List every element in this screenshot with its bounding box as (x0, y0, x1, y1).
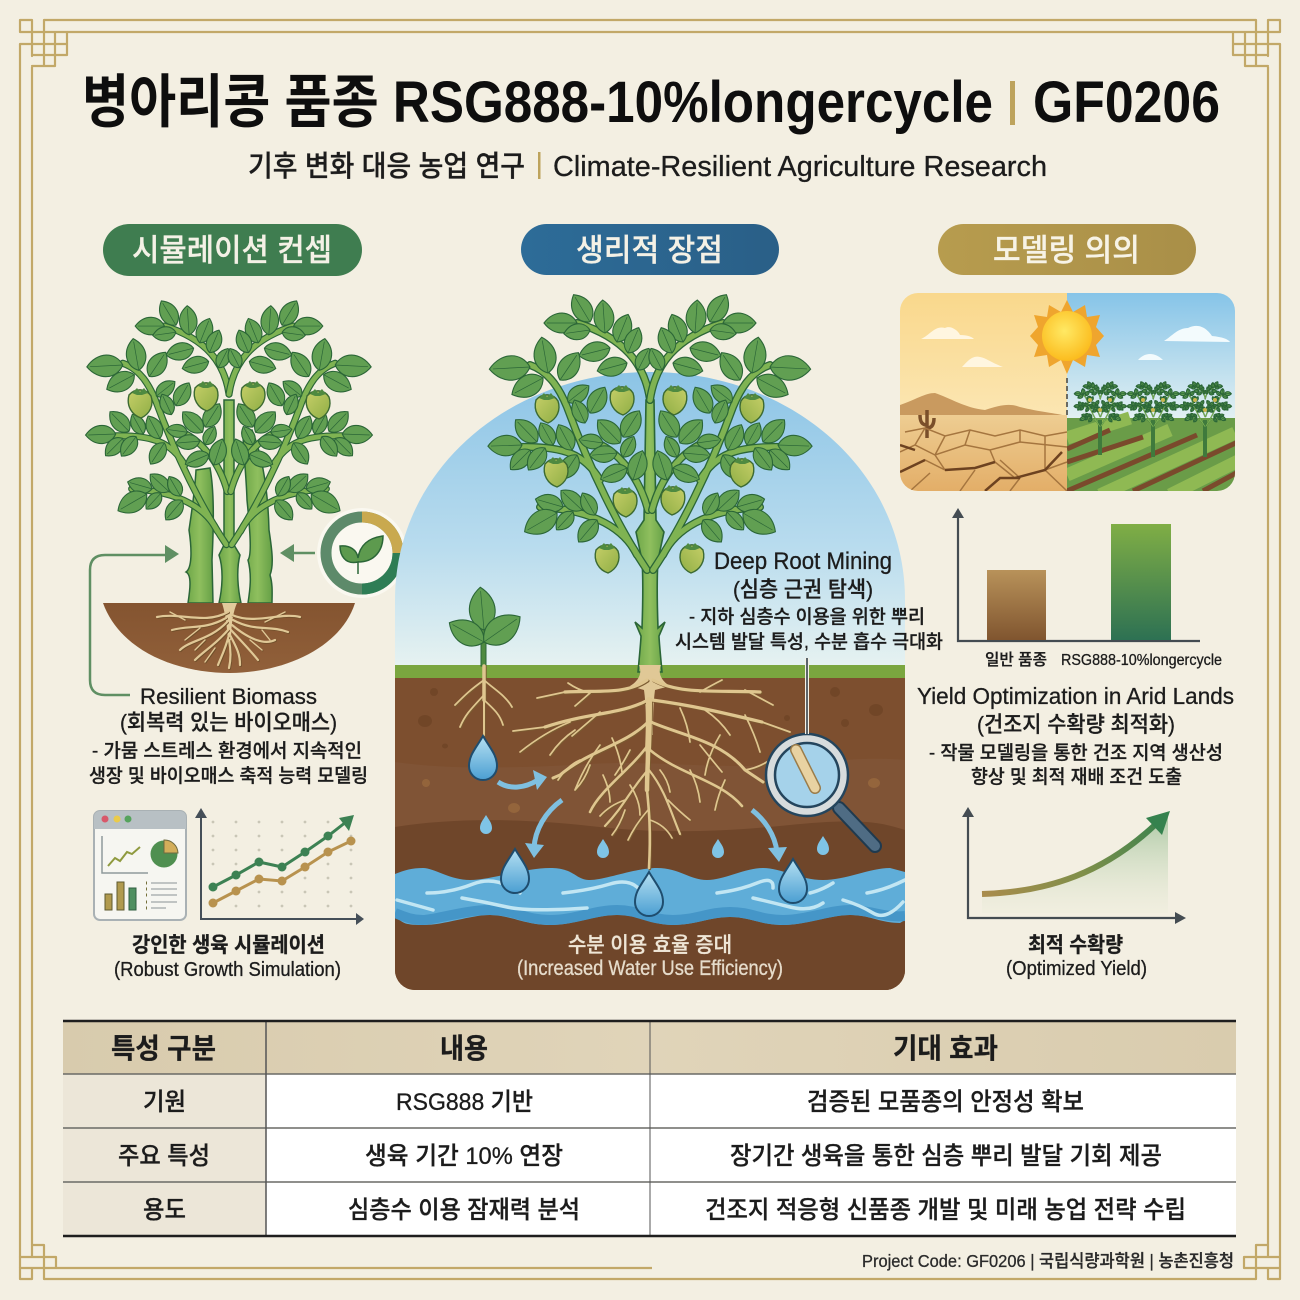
heading pill: simulation concept (103, 224, 362, 276)
table header row: 내용 (440, 1033, 488, 1064)
row: origin: RSG888 기반 (396, 1088, 533, 1116)
subtitle: Climate-Resilient Agriculture Research (553, 151, 1047, 183)
heading pill: modeling significance (938, 224, 1196, 275)
row: origin: 기원 (143, 1088, 186, 1116)
scene: drought vs resilient field (900, 293, 1240, 495)
caption: increased water use efficiency (517, 934, 783, 980)
row: use: 심층수 이용 잠재력 분석 (348, 1196, 580, 1224)
text block: Deep Root Mining (675, 548, 943, 653)
leaf canopy (85, 297, 373, 545)
title: GF0206 (1033, 70, 1220, 135)
text block: Yield Optimization: Yield Optimization in Arid Lands (917, 683, 1234, 709)
table header row: 기대 효과 (893, 1033, 998, 1064)
heading pill: modeling significance: 모델링 의의 (993, 233, 1140, 268)
deep roots (455, 665, 791, 869)
icon: ring with sprout (317, 508, 407, 598)
caption: increased water use efficiency: (Increased Water Use Efficiency) (517, 957, 783, 980)
heading pill: physiological advantage: 생리적 장점 (576, 233, 723, 268)
soil layers (395, 676, 905, 1000)
row: origin: 검증된 모품종의 안정성 확보 (807, 1088, 1084, 1116)
dry side (900, 293, 1067, 491)
grass strip (395, 665, 905, 678)
caption: robust growth simulation: 강인한 생육 시뮬레이션 (132, 934, 325, 957)
seedling (444, 586, 528, 666)
center panel: soil cross-section with arch sky (395, 372, 905, 1000)
water flow arrows (498, 770, 787, 862)
text block: Yield Optimization: 향상 및 최적 재배 조건 도출 (971, 766, 1182, 788)
thick stems (186, 400, 272, 603)
table header row (63, 1021, 1236, 1074)
table body cells (63, 1021, 1236, 1236)
pods (128, 381, 330, 419)
row: use: 용도 (143, 1197, 186, 1224)
row: main traits: 생육 기간 10% 연장 (365, 1142, 563, 1170)
text block: Resilient Biomass: 생장 및 바이오매스 축적 능력 모델링 (89, 765, 368, 787)
caption: optimized yield: (Optimized Yield) (1006, 958, 1147, 980)
roots (157, 603, 301, 669)
caption: increased water use efficiency: 수분 이용 효율 증대 (568, 934, 732, 957)
row: main traits: 장기간 생육을 통한 심층 뿌리 발달 기회 제공 (730, 1142, 1162, 1170)
soil bowl (103, 603, 355, 673)
subtitle: 기후 변화 대응 농업 연구 (248, 150, 525, 183)
text block: Yield Optimization: (건조지 수확량 최적화) (977, 712, 1175, 737)
left panel: chickpea plant with soil bowl (85, 297, 407, 695)
caption: robust growth simulation (114, 934, 341, 981)
text block: Yield Optimization: - 작물 모델링을 통한 건조 지역 생산성 (929, 742, 1223, 764)
icon: simulation dashboard window (94, 811, 186, 920)
title: 병아리콩 품종 RSG888-10%longercycle (82, 70, 993, 135)
sky (395, 372, 905, 666)
growth arrow bracket (90, 545, 179, 695)
text block: Resilient Biomass: (회복력 있는 바이오매스) (120, 710, 337, 735)
heading pill: physiological advantage (521, 224, 779, 275)
text block: Deep Root Mining: 시스템 발달 특성, 수분 흡수 극대화 (675, 631, 943, 653)
crop rows (1074, 381, 1232, 457)
callout line inner (806, 658, 808, 734)
subtitle (248, 150, 1047, 183)
groundwater band (395, 868, 905, 925)
text block: Resilient Biomass: - 가뭄 스트레스 환경에서 지속적인 (92, 740, 362, 762)
canopy leaves (488, 290, 812, 570)
bar chart: yield comparison (952, 508, 1222, 669)
line chart: robust growth (195, 808, 364, 925)
footer credit: Project Code: GF0206 | 국립식량과학원 | 농촌진흥청 (862, 1251, 1234, 1271)
text block: Resilient Biomass: Resilient Biomass (140, 684, 317, 709)
row: use (143, 1196, 1186, 1224)
water droplets (469, 736, 829, 916)
bar chart: yield comparison: 일반 품종 (985, 651, 1047, 669)
caption: optimized yield (1006, 934, 1147, 980)
row: use: 건조지 적응형 신품종 개발 및 미래 농업 전략 수립 (705, 1196, 1186, 1224)
callout line to magnifier (805, 658, 809, 734)
text block: Deep Root Mining: - 지하 심층수 이용을 위한 뿌리 (689, 606, 925, 628)
text block: Resilient Biomass (89, 684, 368, 787)
text block: Deep Root Mining: Deep Root Mining (714, 548, 892, 575)
caption: robust growth simulation: (Robust Growth Simulation) (114, 959, 341, 981)
sun (1030, 300, 1104, 415)
chickpea pods (535, 385, 764, 573)
text block: Deep Root Mining: (심층 근권 탐색) (733, 577, 873, 602)
magnifying glass over root tip (766, 734, 875, 846)
row: main traits (118, 1142, 1162, 1170)
text block: Yield Optimization (917, 683, 1234, 788)
row: origin (143, 1088, 1084, 1116)
area chart: optimized yield curve (962, 807, 1186, 924)
table header row: 특성 구분 (111, 1033, 216, 1064)
summary table (63, 1021, 1236, 1236)
center plant: trunk and canopy (488, 290, 812, 672)
heading pill: simulation concept: 시뮬레이션 컨셉 (132, 233, 332, 268)
bar chart: yield comparison: RSG888-10%longercycle (1061, 652, 1222, 669)
input arrow (280, 544, 315, 562)
caption: optimized yield: 최적 수확량 (1028, 934, 1123, 957)
wet side (1067, 293, 1240, 495)
row: main traits: 주요 특성 (118, 1142, 210, 1170)
